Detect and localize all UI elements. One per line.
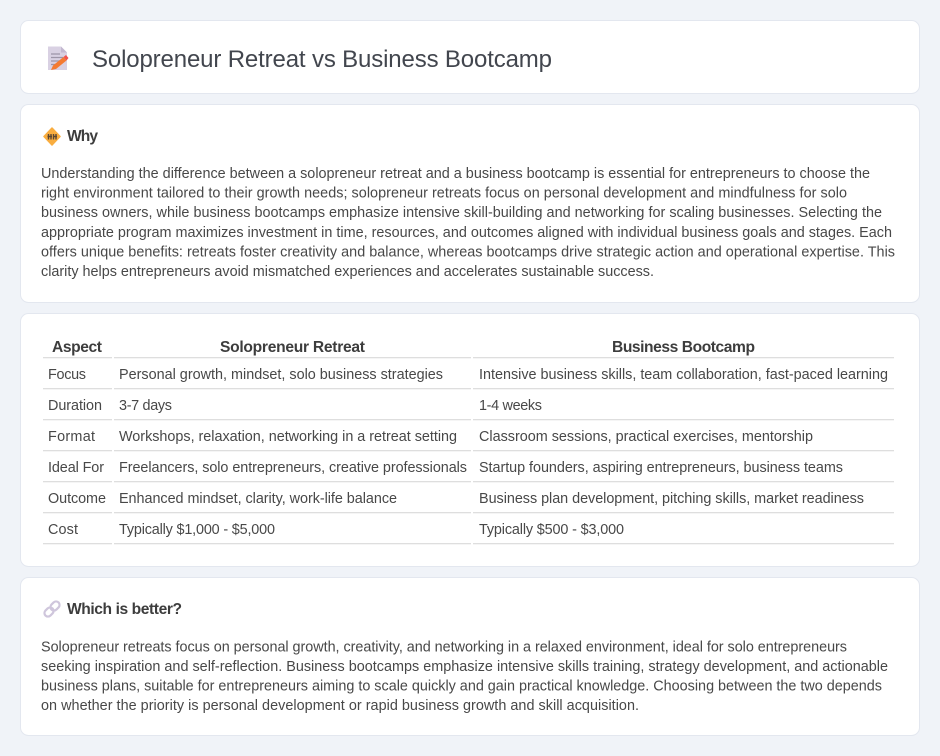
row: cost: Typically $500 - $3,000	[479, 522, 624, 538]
heading: why: Why	[67, 128, 98, 145]
row: duration: 1-4 weeks	[479, 398, 542, 414]
text block: verdict: business plans, suitable for entrepreneurs aiming to scale quickly and gain practical knowledge. Choosing between the two depends	[41, 678, 882, 694]
row: ideal for: Startup founders, aspiring entrepreneurs, business teams	[479, 460, 843, 476]
panel: comparison table	[20, 314, 920, 566]
row: duration: 3-7 days	[119, 398, 172, 414]
text block: why explanation	[41, 166, 895, 280]
text block: why explanation: offers unique benefits: retreats foster creativity and balance, whereas bootcamps drive strategic action and operational expertise. This	[41, 244, 895, 260]
row: format	[48, 429, 813, 445]
row: focus	[48, 367, 888, 383]
text block: why explanation: clarity helps entrepreneurs avoid mismatched experiences and accelerates sustainable success.	[41, 264, 654, 280]
row: outcome: Outcome	[48, 491, 106, 507]
table header row	[52, 339, 755, 356]
row: ideal for: Ideal For	[48, 460, 104, 476]
table header row: Solopreneur Retreat	[220, 339, 365, 356]
row: focus: Personal growth, mindset, solo business strategies	[119, 367, 443, 383]
panel: which is better	[20, 578, 920, 736]
row: duration: Duration	[48, 398, 102, 414]
row: cost: Typically $1,000 - $5,000	[119, 522, 275, 538]
row: format: Workshops, relaxation, networking in a retreat setting	[119, 429, 457, 445]
icon: orange diamond sign	[44, 128, 60, 145]
row: ideal for	[48, 460, 843, 476]
row: outcome	[48, 491, 864, 507]
row: focus: Intensive business skills, team collaboration, fast-paced learning	[479, 367, 888, 383]
row: format: Format	[48, 429, 95, 445]
icon: document with pencil	[48, 46, 68, 70]
row: duration	[48, 398, 542, 414]
panel: why	[20, 104, 920, 302]
text block: verdict: seeking inspiration and self-reflection. Business bootcamps emphasize intensive skills training, strategy development, and actionable	[41, 659, 888, 675]
row: cost: Cost	[48, 522, 78, 538]
row: outcome: Business plan development, pitching skills, market readiness	[479, 491, 864, 507]
heading: which is better: Which is better?	[67, 601, 182, 618]
icon: chain link	[43, 600, 61, 618]
title: Solopreneur Retreat vs Business Bootcamp	[92, 46, 552, 73]
row: cost	[48, 522, 624, 538]
row: outcome: Enhanced mindset, clarity, work-life balance	[119, 491, 397, 507]
text block: verdict: on whether the priority is personal development or rapid business growth and skill acquisition.	[41, 698, 639, 714]
text block: why explanation: Understanding the difference between a solopreneur retreat and a business bootcamp is essential for entrepreneurs to choose the	[41, 166, 870, 182]
panel: title header	[20, 20, 920, 94]
text block: verdict	[41, 640, 888, 714]
text block: why explanation: business owners, while business bootcamps emphasize intensive skill-building and networking for scaling businesses. Selecting the	[41, 205, 882, 221]
row: focus: Focus	[48, 367, 86, 383]
text block: why explanation: appropriate program maximizes investment in time, resources, and outcomes aligned with individual business goals and stages. Each	[41, 225, 892, 241]
row: format: Classroom sessions, practical exercises, mentorship	[479, 429, 813, 445]
row: ideal for: Freelancers, solo entrepreneurs, creative professionals	[119, 460, 467, 476]
table header row: Aspect	[52, 339, 102, 356]
text block: verdict: Solopreneur retreats focus on personal growth, creativity, and networking in a relaxed environment, ideal for solo entrepreneurs	[41, 640, 847, 656]
text block: why explanation: right environment tailored to their growth needs; solopreneur retreats focus on personal development and mindfulness for solo	[41, 186, 847, 202]
table header row: Business Bootcamp	[612, 339, 755, 356]
